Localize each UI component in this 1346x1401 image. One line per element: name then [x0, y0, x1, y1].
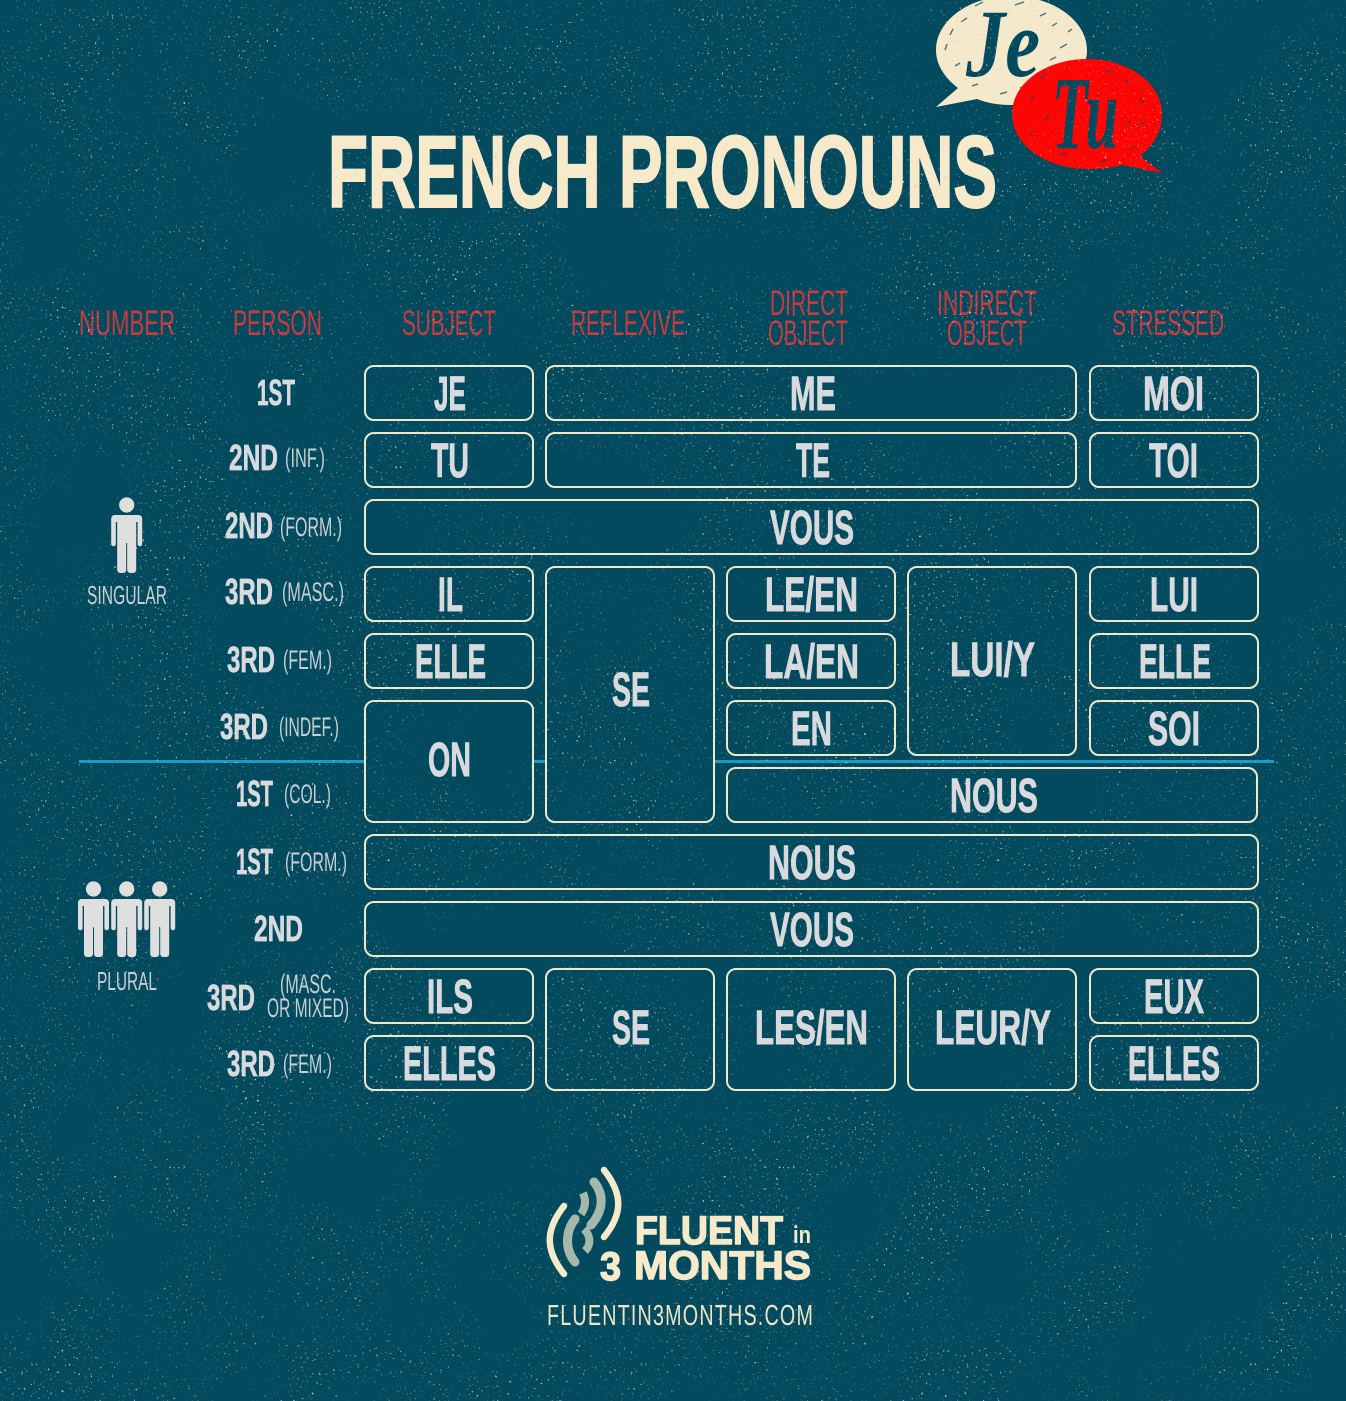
header: direct object: OBJECT	[768, 314, 848, 353]
cell: te	[546, 433, 1076, 488]
icon: speech bubble Tu	[1012, 56, 1162, 173]
person: 3rd feminine: (FEM.)	[283, 645, 332, 675]
cell: moi: MOI	[1143, 368, 1204, 421]
cell: on	[365, 701, 533, 822]
cell: je	[365, 366, 533, 421]
person: 2nd informal: 2ND	[229, 437, 278, 478]
header: reflexive: REFLEXIVE	[571, 304, 685, 343]
cell: la/en	[727, 634, 895, 689]
person: 3rd indefinite	[220, 706, 339, 747]
cell: on: ON	[428, 734, 471, 787]
person: 3rd feminine	[227, 639, 332, 680]
header: number: NUMBER	[79, 304, 175, 343]
person: 1st formal: 1ST	[236, 841, 273, 882]
person: 3rd masculine: 3RD	[225, 571, 273, 612]
cell: la/en: LA/EN	[764, 636, 859, 689]
title: FRENCH PRONOUNS	[328, 115, 997, 229]
pronoun table	[365, 366, 1258, 1091]
cell: lui/y	[908, 567, 1076, 755]
cell: eux: EUX	[1144, 971, 1204, 1024]
icon: sound waves	[550, 1170, 618, 1274]
person: 3rd masculine or mixed: 3RD	[207, 977, 255, 1018]
person: 3rd feminine plural	[227, 1043, 332, 1084]
header: subject: SUBJECT	[402, 304, 496, 343]
person: 3rd feminine: 3RD	[227, 639, 275, 680]
cell: vous formal	[365, 500, 1258, 555]
cell: me	[546, 366, 1076, 421]
cell: elle stressed	[1090, 634, 1258, 689]
person: 2nd formal	[225, 505, 342, 546]
singular / plural divider	[79, 760, 1274, 763]
cell: ils	[365, 969, 533, 1024]
cell: elles stressed: ELLES	[1128, 1038, 1220, 1091]
cell: elle stressed: ELLE	[1139, 636, 1211, 689]
person: 3rd indefinite: 3RD	[220, 706, 268, 747]
cell: toi: TOI	[1149, 435, 1198, 488]
cell: nous colloquial	[727, 768, 1257, 823]
cell: les/en: LES/EN	[755, 1002, 868, 1055]
logo wordmark: 3: 3	[600, 1245, 621, 1289]
label: plural: PLURAL	[97, 966, 157, 996]
header: indirect object: INDIRECT	[937, 284, 1037, 323]
cell: elles stressed	[1090, 1036, 1258, 1091]
cell: vous plural: VOUS	[770, 904, 854, 957]
cell: me: ME	[790, 368, 836, 421]
person: 1st colloquial: (COL.)	[284, 779, 331, 809]
header: person: PERSON	[233, 304, 322, 343]
cell: nous formal	[365, 835, 1258, 890]
cell: le/en: LE/EN	[765, 569, 858, 622]
cell: nous colloquial: NOUS	[950, 770, 1038, 823]
person: 3rd masculine or mixed: (MASC.	[280, 969, 336, 999]
cell: toi	[1090, 433, 1258, 488]
website url: FLUENTIN3MONTHS.COM	[547, 1300, 813, 1332]
cell: elles subject	[365, 1036, 533, 1091]
cell: il: IL	[438, 569, 463, 622]
cell: nous formal: NOUS	[768, 837, 856, 890]
cell: soi	[1090, 701, 1258, 756]
cell: en	[727, 701, 895, 756]
cell: elles subject: ELLES	[403, 1038, 496, 1091]
person labels	[207, 372, 349, 1084]
header: direct object	[768, 284, 848, 353]
cell: tu: TU	[431, 435, 469, 488]
icon: speech bubble Tu: Tu	[1052, 56, 1118, 171]
cell: lui: LUI	[1150, 569, 1198, 622]
person: 2nd formal: 2ND	[225, 505, 273, 546]
header: indirect object: OBJECT	[947, 314, 1027, 353]
person: 3rd masculine: (MASC.)	[282, 577, 344, 607]
person: 2nd formal: (FORM.)	[280, 512, 342, 542]
cell: lui	[1090, 567, 1258, 622]
logo wordmark: fluent: FLUENT	[635, 1209, 783, 1253]
logo: fluent in 3 months	[550, 1170, 811, 1289]
icon: singular person	[111, 497, 142, 573]
person: 3rd masculine	[225, 571, 344, 612]
cell: soi: SOI	[1148, 703, 1200, 756]
logo wordmark: months: MONTHS	[634, 1244, 811, 1288]
cell: moi	[1090, 366, 1258, 421]
person: 1st formal	[236, 841, 347, 882]
cell: leur/y: LEUR/Y	[935, 1002, 1051, 1055]
cell: tu	[365, 433, 533, 488]
label: singular: SINGULAR	[87, 580, 167, 610]
logo wordmark: in: in	[793, 1222, 811, 1249]
cell: elle subject: ELLE	[415, 636, 486, 689]
person: 2nd informal: (INF.)	[285, 443, 325, 473]
person: 2nd plural: 2ND	[254, 908, 303, 949]
header: direct object: DIRECT	[770, 284, 848, 323]
cell: en: EN	[791, 703, 832, 756]
icon: plural people	[78, 881, 175, 957]
column headers	[79, 284, 1224, 353]
cell: ils: ILS	[427, 971, 473, 1024]
cell: vous formal: VOUS	[770, 502, 854, 555]
cell: eux	[1090, 969, 1258, 1024]
header: stressed: STRESSED	[1112, 304, 1224, 343]
person: 1st colloquial: 1ST	[236, 773, 273, 814]
header: indirect object	[937, 284, 1037, 353]
person: 3rd feminine plural: (FEM.)	[283, 1049, 332, 1079]
cell: se singular	[546, 567, 714, 822]
person: 3rd masculine or mixed	[207, 969, 349, 1023]
cell: leur/y	[908, 969, 1076, 1090]
cell: lui/y: LUI/Y	[950, 634, 1035, 687]
person: 3rd feminine plural: 3RD	[227, 1043, 275, 1084]
icon: speech bubble Je	[936, 0, 1087, 107]
cell: il	[365, 567, 533, 622]
cell: te: TE	[796, 435, 830, 488]
person: 3rd masculine or mixed: OR MIXED)	[267, 993, 349, 1023]
cell: se plural: SE	[612, 1002, 650, 1055]
person: 1st formal: (FORM.)	[285, 847, 347, 877]
cell: je: JE	[434, 368, 466, 421]
person: 1st: 1ST	[257, 372, 295, 413]
cell: les/en	[727, 969, 895, 1090]
cell: se singular: SE	[612, 664, 650, 717]
person: 3rd indefinite: (INDEF.)	[279, 712, 339, 742]
person: 1st colloquial	[236, 773, 331, 814]
cell: se plural	[546, 969, 714, 1090]
cell: vous plural	[365, 902, 1258, 957]
cell: elle subject	[365, 634, 533, 689]
